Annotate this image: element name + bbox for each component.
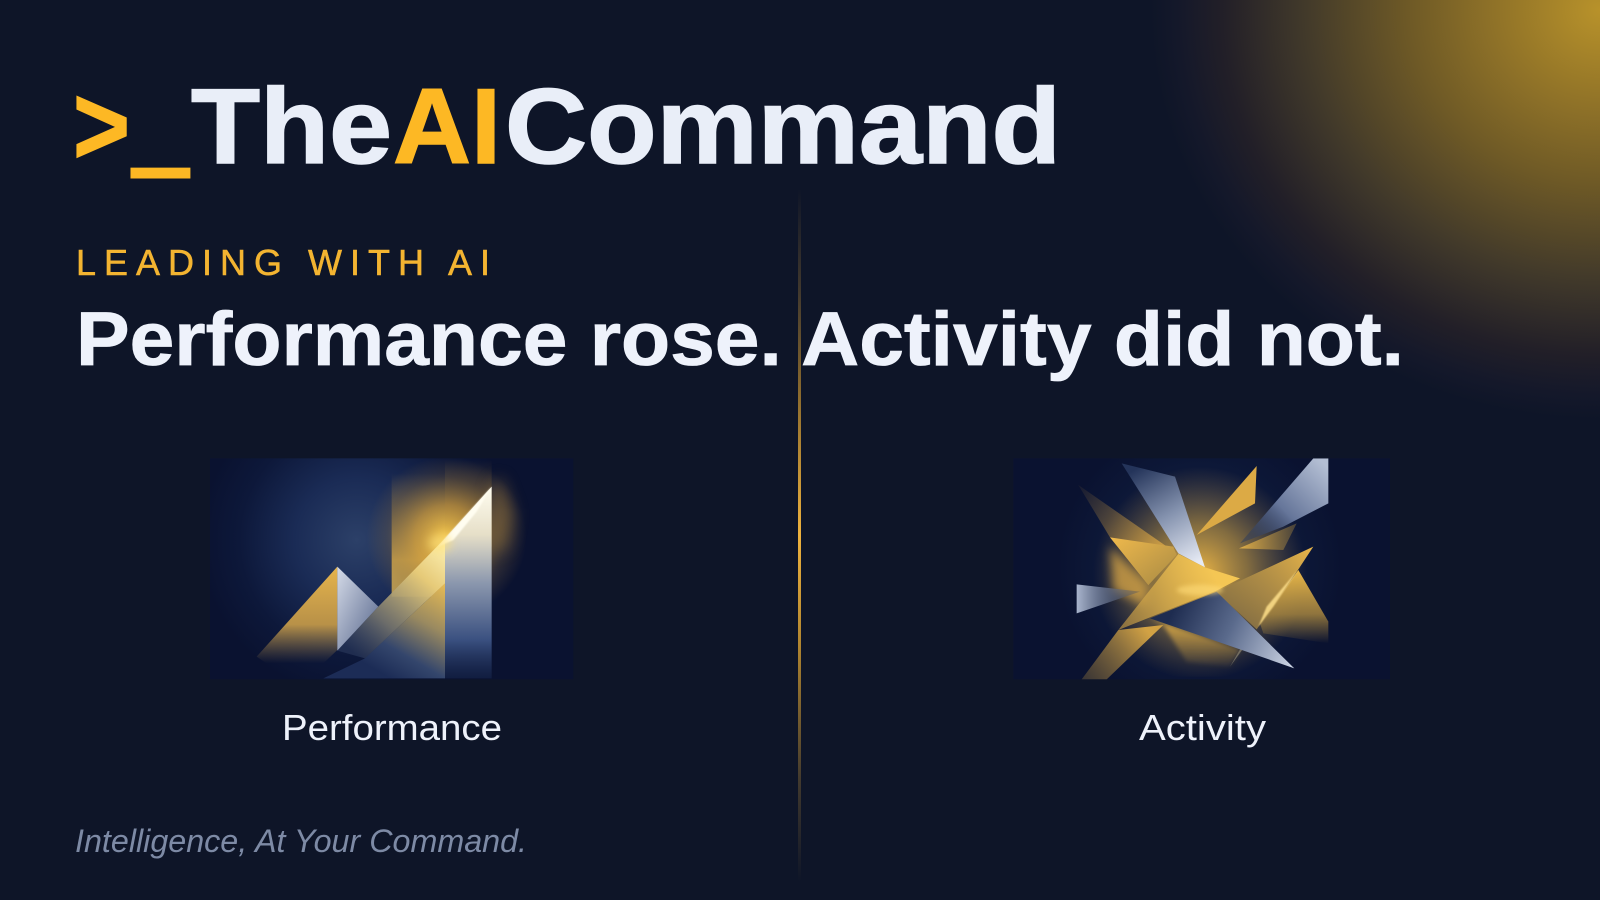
label: activity: Activity <box>1139 707 1266 748</box>
icon: performance rising chart <box>210 458 526 680</box>
logo word The: The <box>191 66 392 186</box>
eyebrow: LEADING WITH AI <box>76 242 490 283</box>
logo prompt chevron: > <box>73 63 130 188</box>
label: performance: Performance <box>282 707 502 748</box>
divider line <box>798 189 801 882</box>
logo word Command: Command <box>505 66 1061 186</box>
icon: activity scattered shards <box>1058 458 1343 680</box>
headline: Performance rose. Activity did not. <box>76 297 1404 382</box>
logo word AI: AI <box>393 66 501 186</box>
tagline: Intelligence, At Your Command. <box>75 823 527 859</box>
corner glow <box>1150 0 1600 420</box>
logo wordmark <box>73 0 1061 204</box>
